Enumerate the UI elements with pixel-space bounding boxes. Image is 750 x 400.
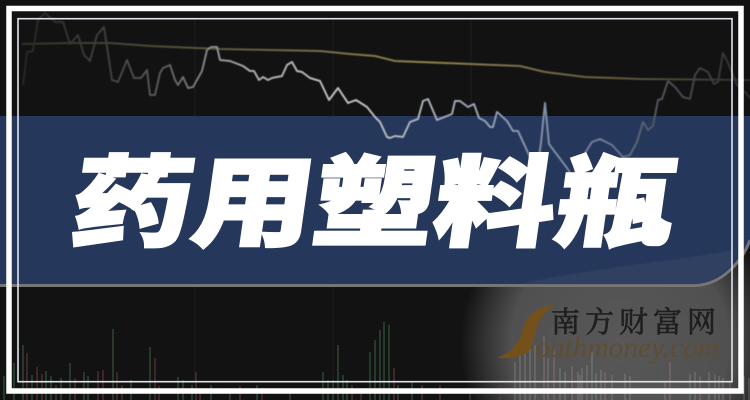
volume bars	[4, 322, 749, 400]
blue title band	[0, 116, 750, 286]
logo swoosh	[497, 305, 556, 358]
moving average line	[22, 43, 750, 80]
vertical chart gridlines	[195, 20, 471, 380]
title: 药用塑料瓶	[65, 150, 684, 259]
watermark glow	[440, 230, 750, 400]
band lower right glow	[520, 250, 732, 284]
price line	[23, 13, 750, 185]
logo chinese name: 南方财富网	[551, 306, 721, 339]
logo: southmoney watermark	[497, 305, 721, 364]
logo domain: outhmoney.com	[535, 331, 719, 364]
